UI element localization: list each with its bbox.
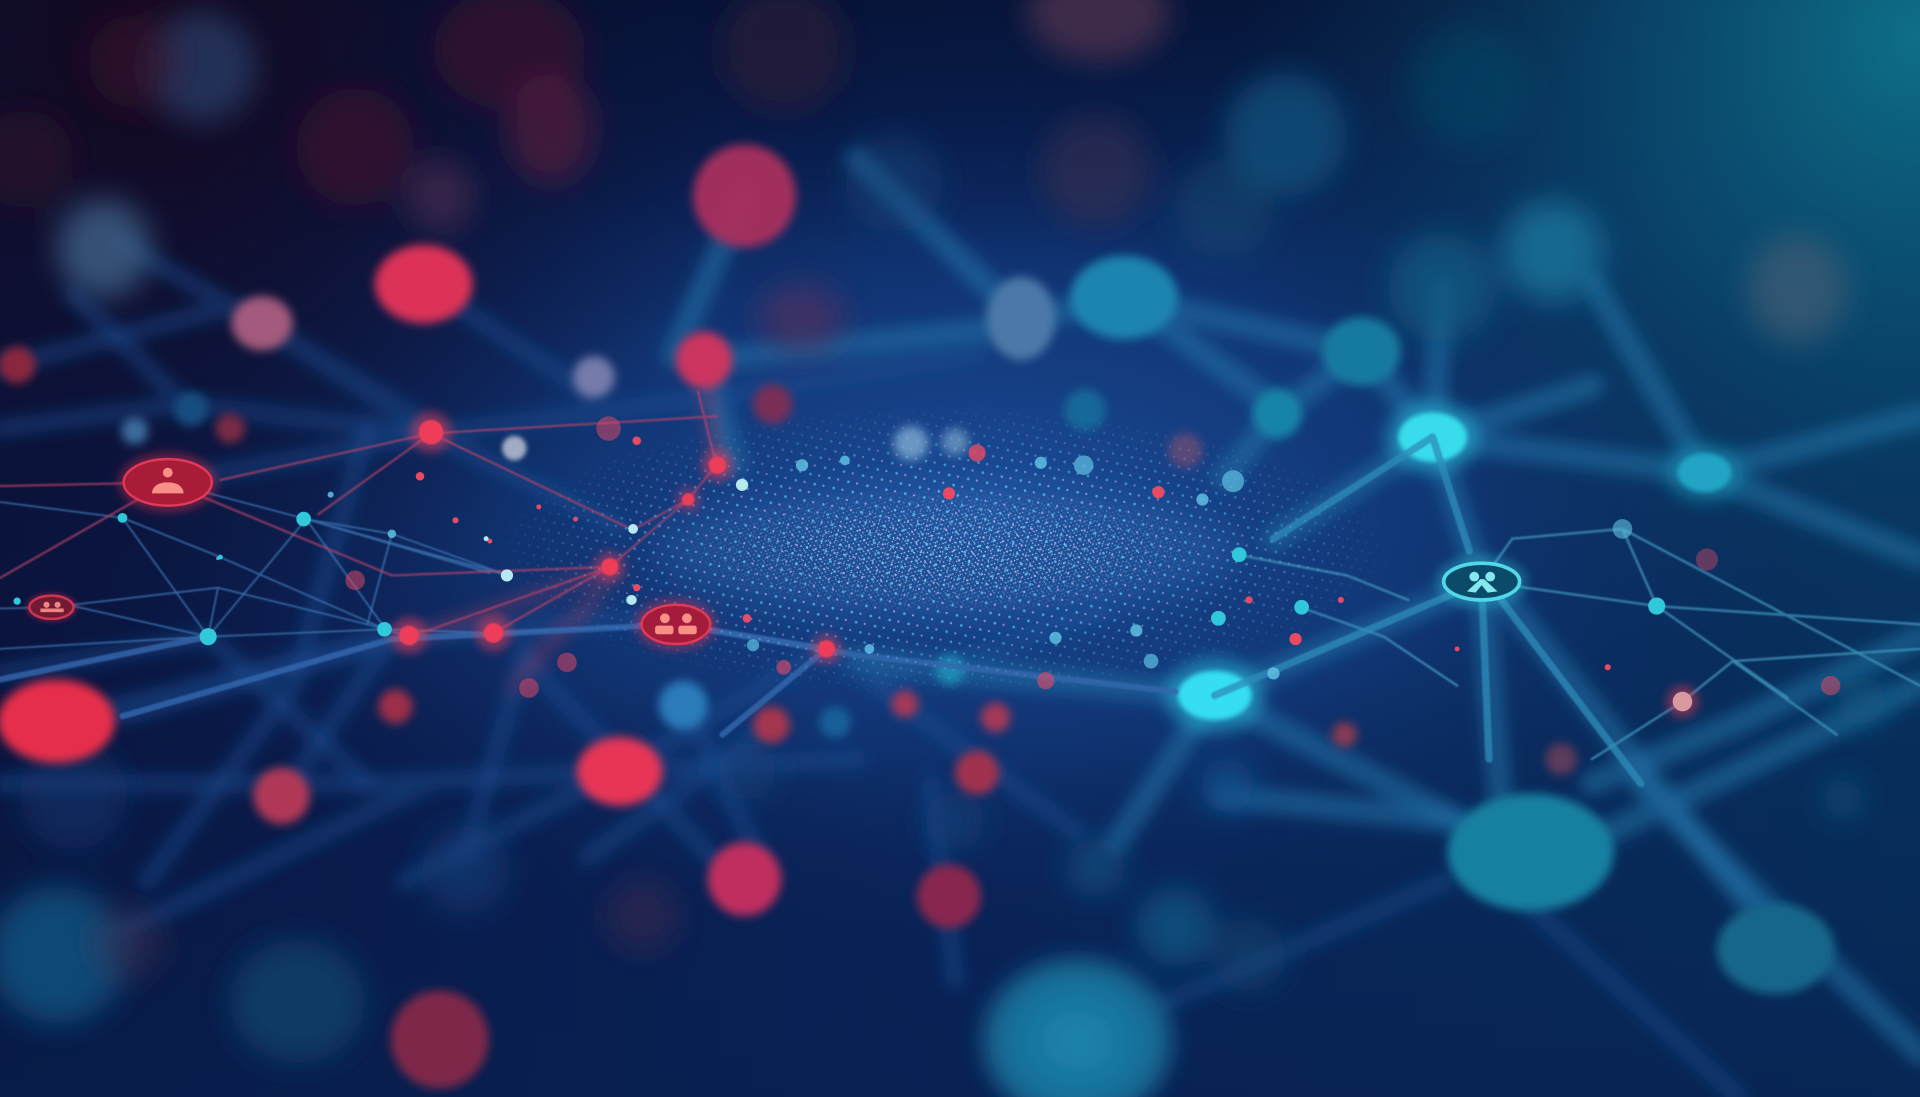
dense central particle field (505, 410, 1376, 693)
sharp network lines (0, 392, 1920, 784)
small cyan nodes (13, 479, 1665, 645)
mid-focus red bokeh circles (0, 144, 1577, 1088)
scattered small particles (216, 416, 1840, 698)
icon: small red user node (26, 593, 77, 622)
small foreground blue bokeh (659, 655, 965, 738)
icon: red user node left (119, 453, 217, 512)
small glowing red nodes (391, 411, 1698, 717)
glowing cyan hub nodes (1166, 402, 1744, 732)
icon: cyan hub node right (1435, 555, 1528, 608)
large foreground blue bokeh (982, 957, 1173, 1097)
icon: red group node center (636, 599, 716, 650)
mid-focus blue bokeh circles (121, 256, 1834, 994)
